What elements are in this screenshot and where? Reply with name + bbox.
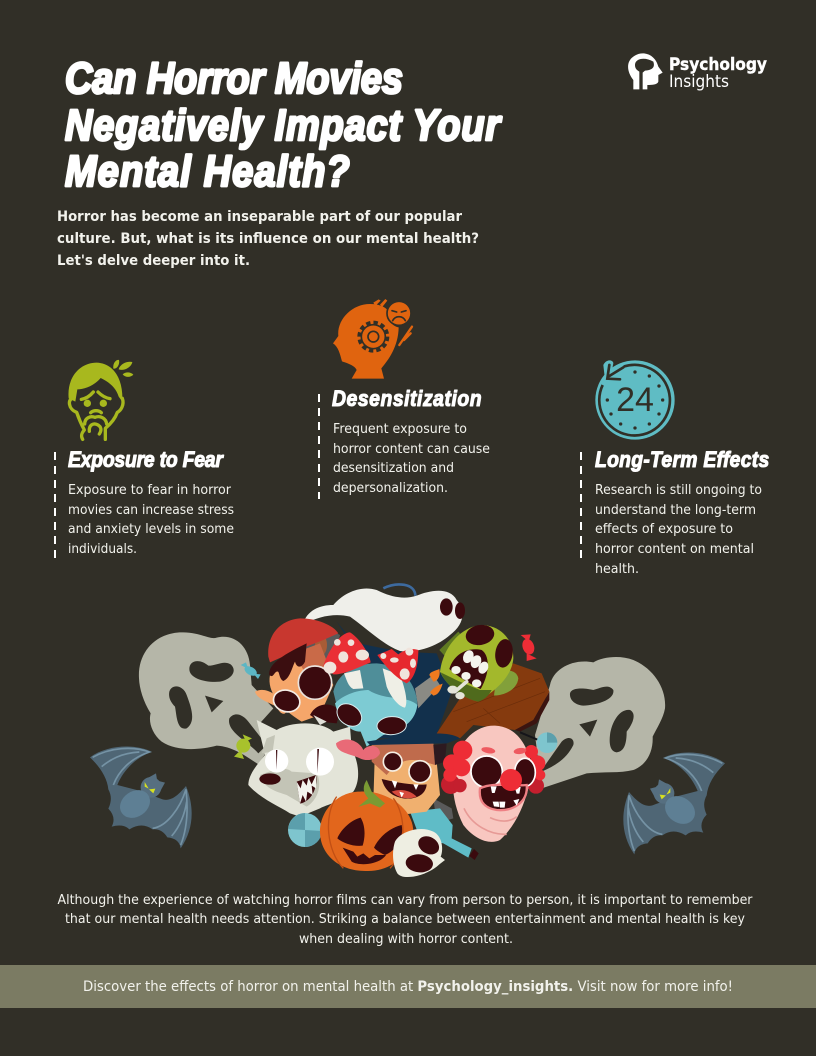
ghost: [303, 589, 465, 651]
text: long-term effects: [595, 483, 762, 577]
text: desensitization: Frequent exposure to: [333, 422, 467, 437]
heading: Desensitization: Desensitization: [332, 387, 482, 411]
wolf: [248, 720, 380, 817]
intro text: Let's delve deeper into it.: [57, 253, 250, 269]
text: long-term effects: effects of exposure to: [595, 522, 733, 537]
witch kid: [367, 734, 472, 858]
candles: [415, 669, 443, 708]
text: long-term effects: horror content on mental: [595, 542, 754, 557]
text: desensitization: [333, 422, 490, 496]
closing paragraph: that our mental health needs attention. Striking a balance between entertainment and mental health is key: [65, 912, 745, 927]
candy ball: [288, 813, 322, 847]
title: Negatively Impact Your: [65, 100, 502, 150]
text: exposure to fear: movies can increase stress: [68, 503, 234, 518]
mushrooms: [323, 632, 418, 708]
logo: Psychology Insights: [628, 53, 767, 92]
icon: worried man: [68, 360, 133, 439]
text: exposure to fear: [68, 483, 234, 557]
closing paragraph: Although the experience of watching horror films can vary from person to person, it is important to remember: [58, 893, 753, 908]
text: long-term effects: health.: [595, 562, 639, 577]
title: [65, 53, 502, 196]
closing paragraph: [58, 893, 753, 947]
text: exposure to fear: Exposure to fear in horror: [68, 483, 232, 498]
clown: [441, 726, 545, 842]
heading: Long-Term Effects: Long-Term Effects: [595, 448, 769, 472]
boy with red cap: [255, 618, 340, 725]
bat right: [623, 753, 725, 854]
blue ghoul: [333, 663, 417, 747]
call to action band: Discover the effects of horror on mental health at Psychology_insights. Visit now for more info!: [83, 979, 733, 995]
icon: 24 hour clock: [595, 360, 675, 440]
text: long-term effects: understand the long-term: [595, 503, 756, 518]
witch hat and coffin: [337, 584, 549, 738]
worm: [336, 740, 380, 760]
logo: Psychology Insights: Insights: [669, 72, 729, 92]
candy red: [520, 634, 537, 661]
text: exposure to fear: individuals.: [68, 542, 137, 557]
title: Mental Health?: [65, 146, 350, 196]
closing paragraph: when dealing with horror content.: [299, 932, 513, 947]
icon: 24 hour clock: 24: [616, 381, 654, 419]
icon: head with gear: [333, 299, 412, 379]
logo: Psychology Insights: Psychology: [669, 55, 767, 75]
heading: Exposure to Fear: Exposure to Fear: [68, 448, 224, 472]
title: Can Horror Movies: [65, 53, 403, 103]
lollipop: [520, 732, 557, 753]
illustration: horror characters: [90, 584, 725, 877]
zombie: [439, 623, 518, 702]
right scream mask: [535, 657, 665, 788]
text: desensitization: depersonalization.: [333, 481, 448, 496]
small candies: [234, 662, 261, 759]
pumpkin: [320, 780, 413, 871]
intro text: culture. But, what is its influence on our mental health?: [57, 231, 479, 247]
text: desensitization: horror content can cause: [333, 442, 490, 457]
intro text: Horror has become an inseparable part of our popular: [57, 209, 462, 225]
text: desensitization: desensitization and: [333, 461, 454, 476]
bat left: [90, 747, 192, 848]
intro text: [57, 209, 479, 269]
text: exposure to fear: and anxiety levels in some: [68, 522, 234, 537]
text: long-term effects: Research is still ongoing to: [595, 483, 762, 498]
call to action band: [0, 965, 816, 1008]
skull and arm: [393, 829, 479, 877]
left scream mask: [139, 632, 273, 764]
